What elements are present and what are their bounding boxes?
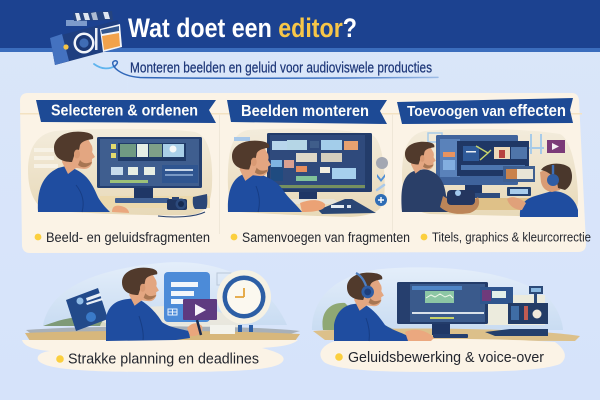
monitor [267, 133, 372, 204]
caption: Samenvoegen van fragmenten: Samenvoegen van fragmenten [242, 230, 410, 245]
person with headphones [334, 273, 434, 341]
person [106, 268, 202, 341]
caption pill [22, 340, 298, 372]
caption pill [320, 339, 565, 372]
person [228, 141, 325, 212]
keyboard [318, 199, 376, 214]
camera and speaker [167, 194, 207, 210]
swirl underline [94, 61, 438, 78]
monitor [97, 137, 202, 203]
mini monitor and mixer [485, 286, 548, 336]
effects card [480, 287, 513, 304]
note on desk [210, 325, 235, 334]
banner: Selecteren & ordenen [36, 100, 216, 123]
monitor [436, 135, 529, 198]
person [38, 132, 129, 213]
scene: selecting and ordering [28, 129, 212, 217]
panel: planning and deadlines [22, 262, 300, 372]
banner: Selecteren & ordenen: Selecteren & ordenen [51, 102, 198, 120]
scene background [312, 267, 563, 330]
title: Wat doet een editor? [128, 13, 357, 43]
banner: Beelden monteren [227, 100, 387, 124]
header band [0, 0, 600, 52]
banner: Toevoegen van effecten [397, 98, 573, 124]
caption pill: Geluidsbewerking & voice-over [348, 349, 544, 366]
floating card and tablet [503, 166, 535, 196]
scene: editing footage [228, 129, 388, 217]
scene: adding effects [401, 129, 578, 217]
right person with headphones [507, 164, 578, 217]
desk [25, 331, 300, 341]
panel: three editor tasks [20, 93, 591, 253]
banner: Toevoegen van effecten: Toevoogen van effecten [407, 102, 566, 120]
banner: Beelden monteren: Beelden monteren [241, 103, 369, 120]
side icons [375, 157, 388, 206]
blue document card [164, 272, 210, 322]
scene background [43, 262, 287, 325]
caption pill: Strakke planning en deadlines [68, 350, 259, 368]
video card [547, 140, 565, 153]
left person [401, 142, 479, 214]
monitor [397, 282, 488, 338]
panel: sound editing and voice-over [312, 267, 580, 372]
desk [313, 328, 580, 341]
icon: film camera with clapperboard [50, 11, 122, 65]
left card [66, 288, 108, 331]
video card [183, 299, 217, 320]
subtitle: Monteren beelden en geluid voor audioviswele producties [130, 60, 432, 76]
caption: Beeld- en geluidsfragmenten: Beeld- en geluidsfragmenten [46, 230, 210, 245]
clock [217, 270, 271, 332]
